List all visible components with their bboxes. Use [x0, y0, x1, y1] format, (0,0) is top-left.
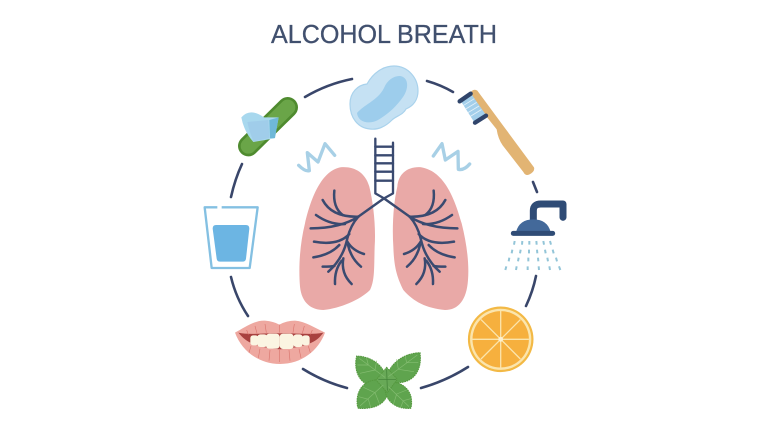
icon: sanitary pad: [350, 66, 418, 129]
right bronchi: [384, 191, 457, 284]
icon: bamboo toothbrush: [460, 90, 534, 175]
water drops: [505, 241, 560, 270]
left bronchi: [311, 191, 384, 284]
right lung: [393, 167, 468, 310]
left breath squiggle: [299, 144, 335, 171]
icon: bandage with tissue: [241, 107, 288, 146]
left lung: [299, 167, 375, 310]
icon: mint leaves: [356, 353, 420, 408]
teeth: [250, 334, 310, 349]
icon: shower head: [505, 204, 563, 270]
title: ALCOHOL BREATH: [271, 21, 497, 49]
icon: glass of water: [205, 207, 258, 268]
icon: smiling mouth with teeth: [235, 321, 325, 364]
right breath squiggle: [433, 144, 470, 170]
icon: orange slice: [468, 306, 534, 372]
windpipe: [375, 139, 393, 198]
bristles: [460, 94, 487, 123]
water: [213, 225, 249, 262]
dashed circular ring of arcs: [231, 79, 537, 388]
icon: lungs with windpipe: [299, 139, 470, 310]
toothbrush handle: [470, 90, 534, 175]
